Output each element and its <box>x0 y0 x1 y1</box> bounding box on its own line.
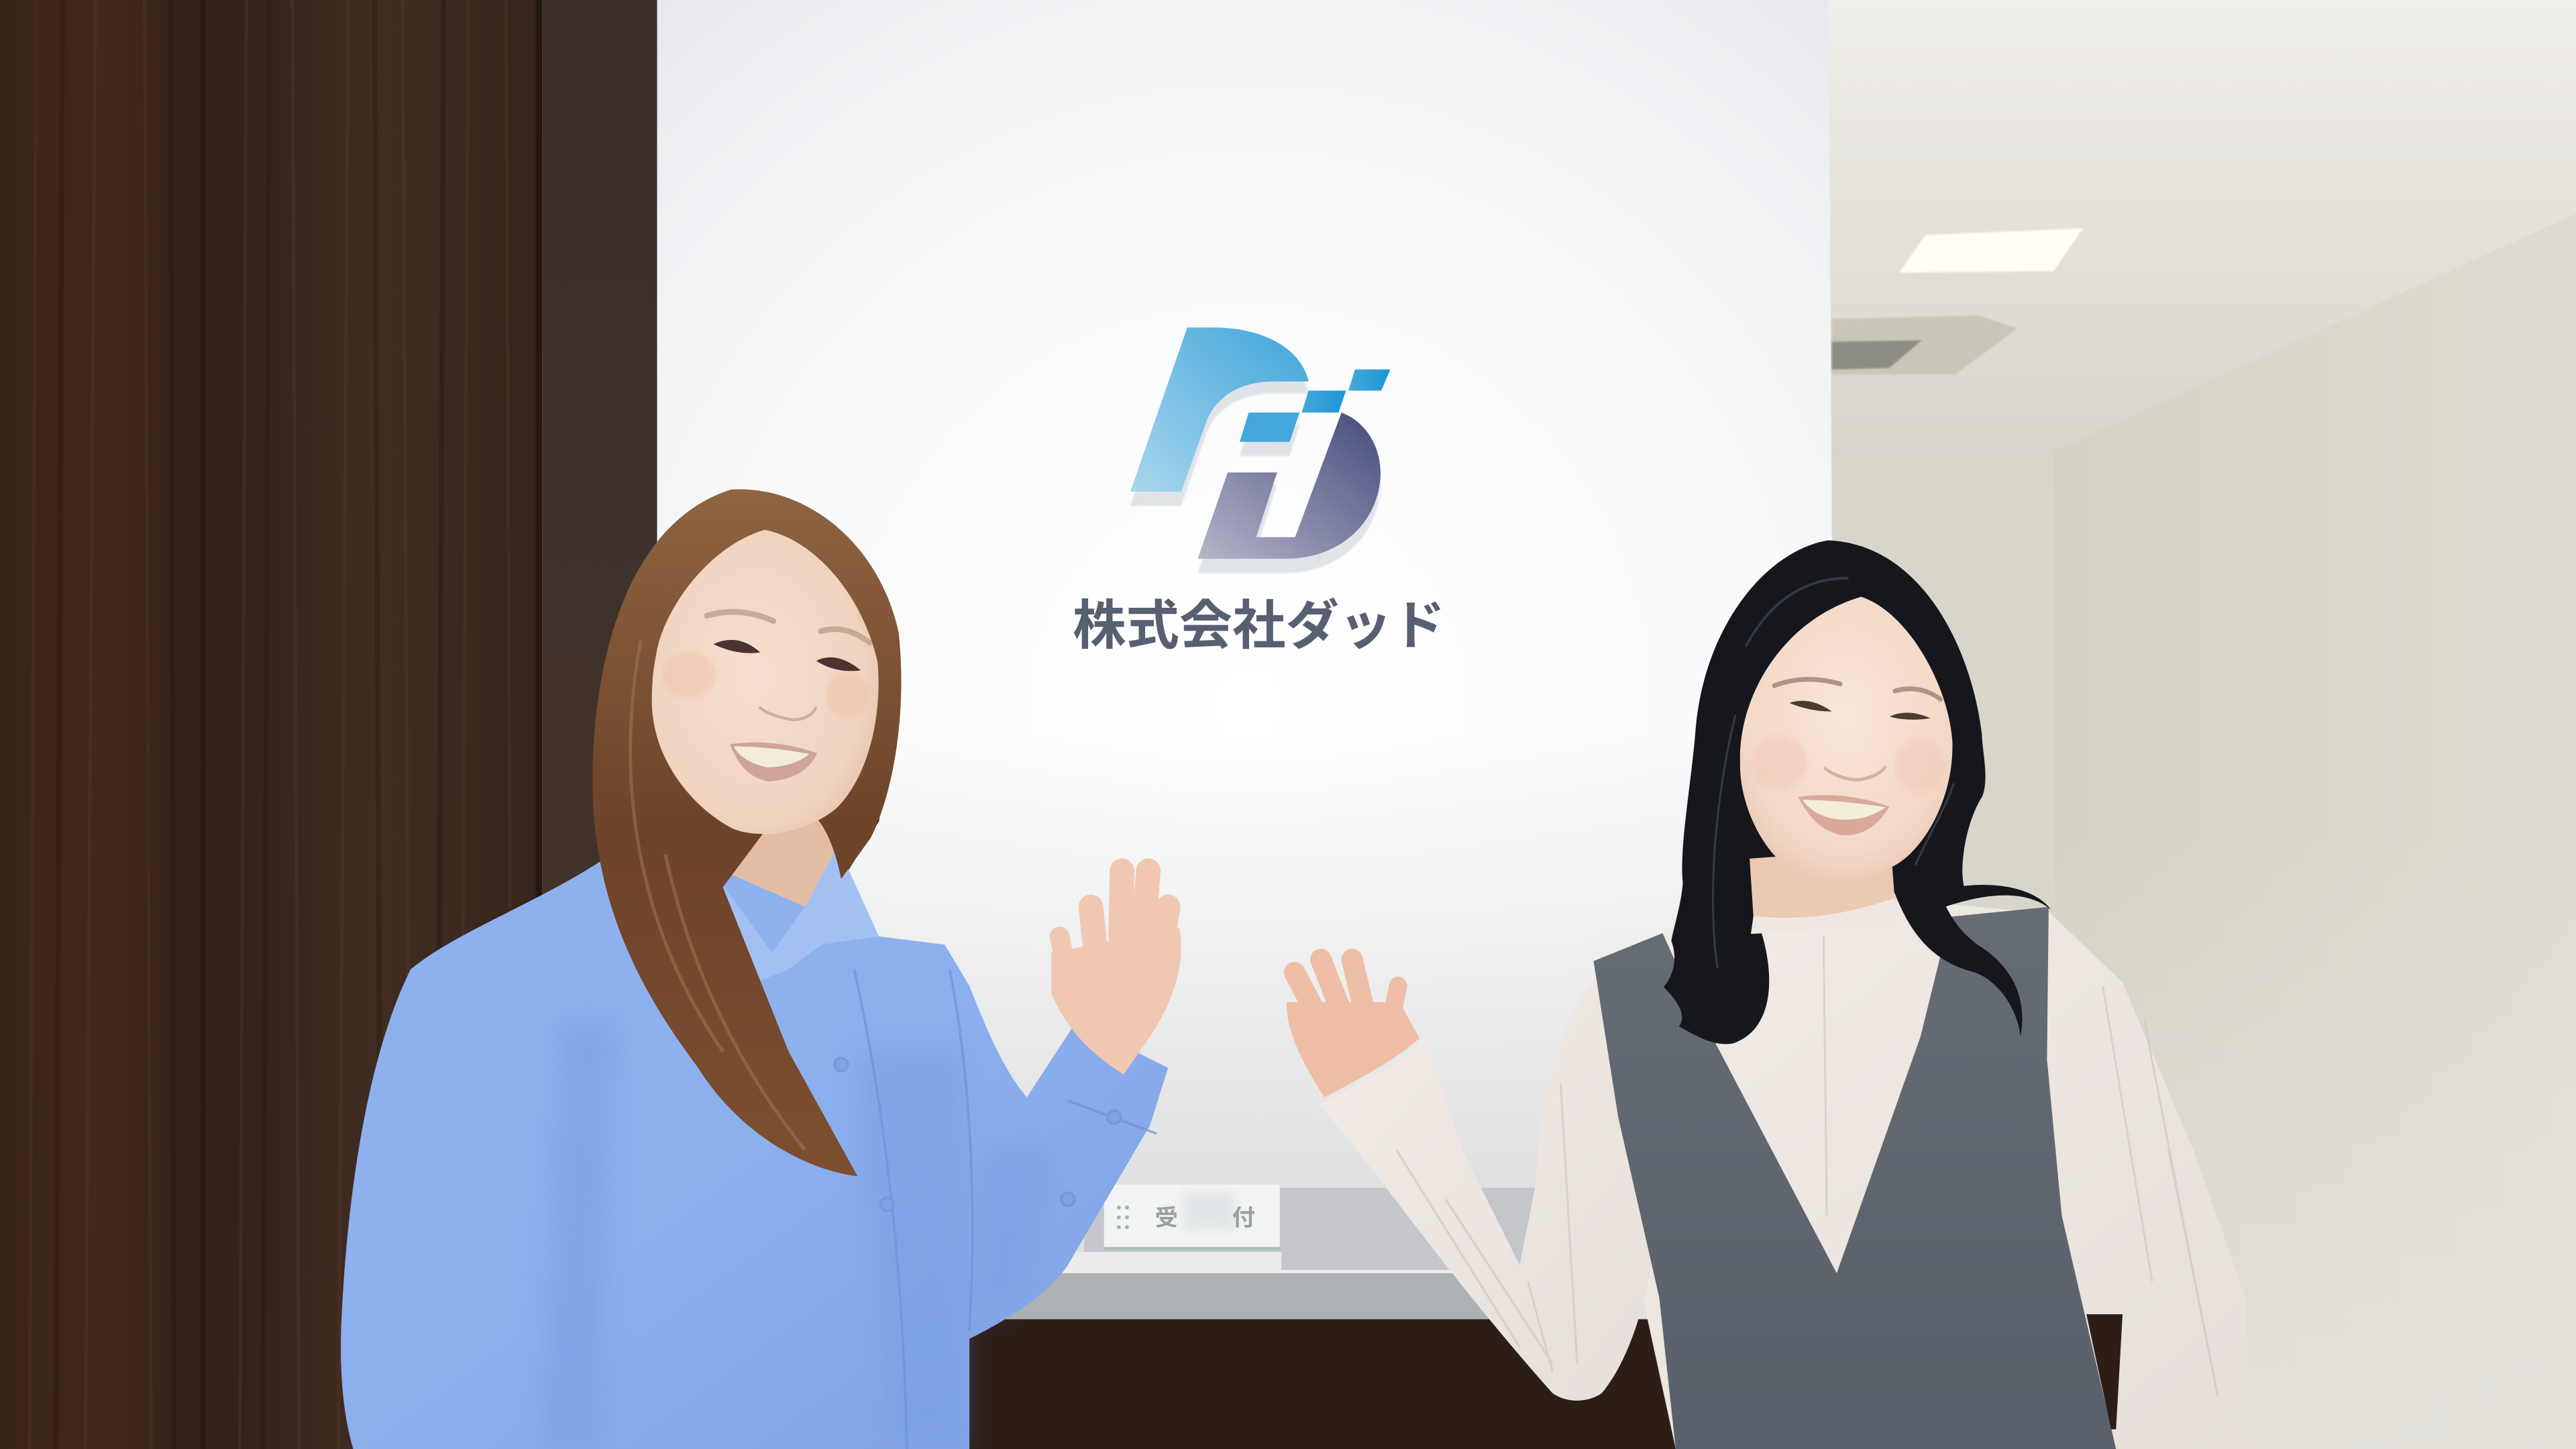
person: right woman <box>1287 541 2251 1449</box>
left woman neck <box>706 789 854 936</box>
right woman eyebrows <box>1774 680 1941 700</box>
right woman hair highlights <box>1713 578 1953 968</box>
right woman left arm sleeve <box>1320 969 1651 1401</box>
reception sign <box>1104 1185 1280 1250</box>
right woman neck <box>1750 849 1894 918</box>
company name: 株式会社ダッド <box>1073 596 1445 655</box>
left woman shirt <box>341 845 1168 1449</box>
left woman collar <box>706 846 879 985</box>
left woman eyebrows <box>706 612 870 643</box>
gap between vest and sleeve <box>2086 1314 2123 1430</box>
right woman sweater neckline <box>1751 898 1902 934</box>
left woman eyes <box>713 640 861 671</box>
background: wood panels <box>0 0 657 1449</box>
right woman sweater <box>1594 900 2251 1449</box>
logo mark shadow <box>1130 339 1381 573</box>
background: white wall <box>657 0 1832 1331</box>
right woman sleeve rib lines <box>1397 936 2218 1397</box>
background: ceiling and right wall <box>1823 0 2576 1449</box>
left woman face <box>652 530 879 834</box>
logo mark <box>1130 327 1391 559</box>
right woman vest <box>1594 907 2116 1449</box>
right woman smile <box>1799 795 1890 835</box>
right woman blush <box>1751 735 1946 794</box>
person: left woman <box>341 489 1181 1449</box>
left woman hair strands <box>631 641 805 1150</box>
left woman nose <box>759 707 816 720</box>
right woman face <box>1740 597 1953 879</box>
left woman shirt folds <box>835 969 1157 1449</box>
right woman nose <box>1824 766 1886 780</box>
reception counter <box>969 1188 2119 1449</box>
left woman smile <box>730 743 817 782</box>
left woman hair <box>592 489 902 1176</box>
reception sign: 付 <box>1232 1205 1255 1231</box>
left woman hand <box>1051 871 1181 1075</box>
right woman eyes <box>1789 701 1931 720</box>
left woman blush <box>662 652 870 718</box>
ceiling light <box>1899 228 2083 273</box>
company logo sign <box>1073 327 1445 655</box>
left woman back hair <box>723 690 896 920</box>
right woman hand <box>1287 959 1419 1097</box>
air conditioning vent <box>1832 315 2017 374</box>
left woman shirt shading <box>542 1018 1051 1449</box>
reception sign: 受 <box>1155 1205 1178 1231</box>
right woman hair <box>1664 541 2051 1044</box>
